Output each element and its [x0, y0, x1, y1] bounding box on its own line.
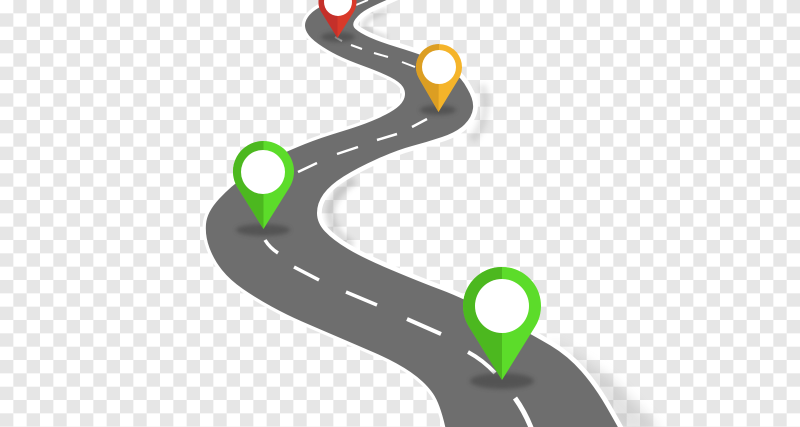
green pin, middle — [233, 141, 294, 236]
road white right edge — [317, 0, 625, 427]
road soft shadows — [330, 10, 662, 427]
green pin, front — [463, 267, 541, 389]
red pin — [318, 0, 357, 42]
road surface with white edge — [206, 0, 625, 427]
road centre dashes — [265, 0, 532, 427]
yellow pin — [416, 44, 462, 115]
